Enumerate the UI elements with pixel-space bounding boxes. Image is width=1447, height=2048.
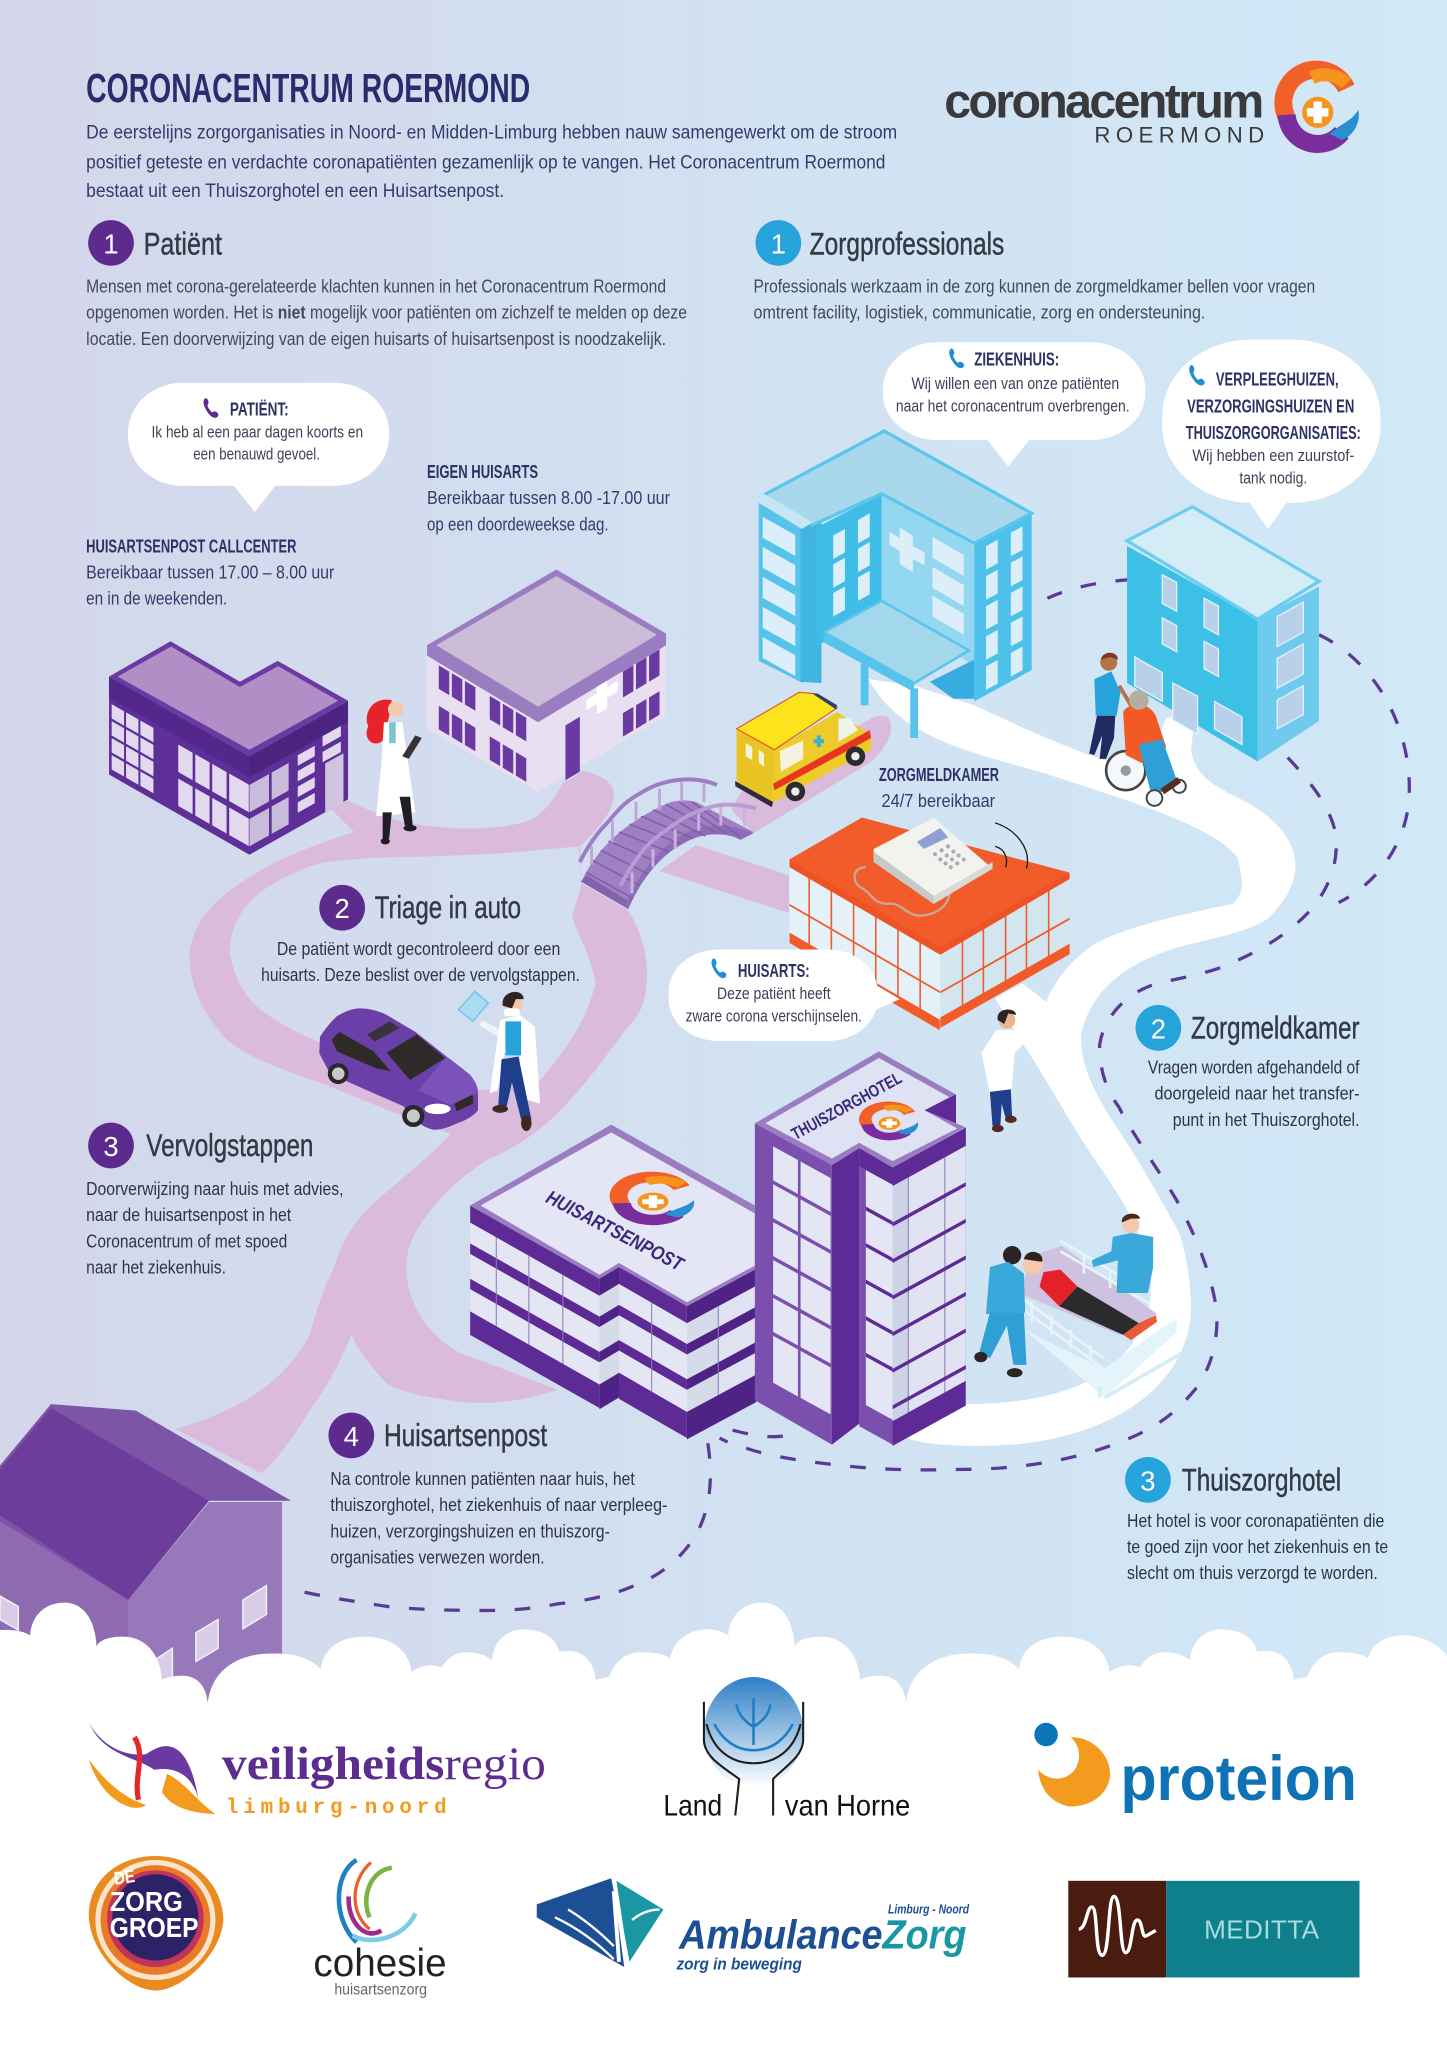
building: purple callcenter (109, 641, 348, 856)
logo: ambulancezorg: zorg in beweging (676, 1955, 802, 1974)
person: doctor with clipboard (367, 700, 422, 844)
section: zorgprofessionals: omtrent facility, logistiek, communicatie, zorg en ondersteuning. (754, 302, 1205, 323)
section: huisartsenpost: thuiszorghotel, het ziekenhuis of naar verpleeg- (330, 1494, 667, 1515)
dashed routes (293, 580, 1409, 1610)
logo: de zorggroep: ZORG (110, 1886, 183, 1917)
person: nurse with wheelchair patient (1089, 653, 1186, 806)
intro text: De eerstelijns zorgorganisaties in Noord- en Midden-Limburg hebben nauw samengewerkt om de stroom (86, 121, 897, 143)
text: huisartsenpost callcenter: Bereikbaar tussen 17.00 – 8.00 uur (86, 562, 334, 583)
building: eigen huisarts practice (427, 569, 666, 792)
logo: land van horne (663, 1677, 910, 1823)
building: thuiszorghotel tower: THUISZORGHOTEL (788, 1068, 905, 1144)
speech bubble: verpleeghuizen: THUISZORGORGANISATIES: (1186, 422, 1361, 443)
section: triage in auto: huisarts. Deze beslist over de vervolgstappen. (261, 964, 580, 985)
section: patient: Mensen met corona-gerelateerde klachten kunnen in het Coronacentrum Roermond (86, 276, 666, 297)
title: CORONACENTRUM ROERMOND (86, 65, 530, 111)
speech bubble: patient: een benauwd gevoel. (193, 446, 320, 464)
logo: cohesie (313, 1860, 447, 1998)
logo: proteion (1034, 1723, 1357, 1814)
text: eigen huisarts: EIGEN HUISARTS (427, 461, 538, 482)
logo: coronacentrum roermond (944, 70, 1359, 147)
speech bubble: patient: Ik heb al een paar dagen koorts en (151, 424, 363, 442)
section: zorgprofessionals (754, 220, 1315, 323)
section: vervolgstappen: naar de huisartsenpost in het (86, 1204, 291, 1225)
speech bubble: huisarts: HUISARTS: (738, 960, 810, 981)
logo: veiligheidsregio limburg-noord (89, 1723, 546, 1820)
section: huisartsenpost: Na controle kunnen patiënten naar huis, het (330, 1468, 635, 1489)
text: huisartsenpost callcenter (86, 535, 334, 609)
speech bubble: verpleeghuizen: VERPLEEGHUIZEN, (1216, 368, 1339, 389)
section: triage in auto (261, 885, 580, 985)
person: doctor on phone (981, 1010, 1026, 1132)
logo: coronacentrum roermond: ROERMOND (1094, 122, 1264, 147)
section: thuiszorghotel: 3 (1140, 1465, 1156, 1496)
speech bubble: patient: PATIËNT: (230, 398, 289, 419)
logo: de zorggroep (89, 1856, 223, 1991)
section: thuiszorghotel: Het hotel is voor coronapatiënten die (1127, 1510, 1384, 1531)
section: zorgmeldkamer: Zorgmeldkamer (1191, 1010, 1360, 1045)
section: patient: Patiënt (144, 227, 222, 262)
section: vervolgstappen: naar het ziekenhuis. (86, 1256, 226, 1277)
section: huisartsenpost: organisaties verwezen worden. (330, 1546, 545, 1567)
building: zorgmeldkamer (790, 818, 1070, 1030)
building: huisartsenpost (470, 1125, 756, 1439)
section: thuiszorghotel: slecht om thuis verzorgd te worden. (1127, 1562, 1378, 1583)
section: huisartsenpost: 4 (344, 1421, 359, 1452)
section: zorgmeldkamer: 2 (1151, 1013, 1166, 1044)
speech bubble: ziekenhuis: ZIEKENHUIS: (974, 349, 1059, 370)
logo: land van horne: Land (663, 1790, 722, 1823)
logo: coronacentrum roermond: coronacentrum (944, 75, 1264, 129)
section: thuiszorghotel: te goed zijn voor het ziekenhuis en te (1127, 1536, 1388, 1557)
section: zorgmeldkamer: Vragen worden afgehandeld of (1148, 1057, 1360, 1078)
logo: de zorggroep: DE (113, 1865, 136, 1889)
text: huisartsenpost callcenter: en in de weekenden. (86, 588, 227, 609)
speech bubble: verpleeghuizen: Wij hebben een zuurstof- (1192, 447, 1354, 465)
speech bubble: ziekenhuis: Wij willen een van onze patiënten (912, 375, 1119, 393)
text: zorgmeldkamer label (879, 764, 999, 811)
section: zorgmeldkamer: punt in het Thuiszorghotel. (1173, 1109, 1360, 1130)
section: zorgprofessionals: Zorgprofessionals (810, 227, 1004, 262)
speech bubble: verpleeghuizen: tank nodig. (1239, 469, 1307, 487)
section: zorgmeldkamer (1136, 1005, 1360, 1130)
logo: meditta (1068, 1881, 1360, 1977)
building: huisartsenpost: HUISARTSENPOST (542, 1187, 688, 1277)
building: hospital (759, 431, 1032, 738)
section: vervolgstappen (86, 1123, 343, 1277)
logo: cohesie: cohesie (313, 1942, 447, 1985)
bridge (580, 779, 756, 909)
logo: ambulancezorg (537, 1878, 970, 1974)
car (319, 1008, 478, 1130)
section: zorgmeldkamer: doorgeleid naar het transfer- (1154, 1083, 1360, 1104)
intro text: bestaat uit een Thuiszorghotel en een Huisartsenpost. (86, 180, 504, 202)
logo: veiligheidsregio limburg-noord: limburg-noord (226, 1797, 447, 1820)
section: triage in auto: Triage in auto (375, 890, 521, 925)
section: patient: 1 (103, 228, 119, 259)
section: patient (86, 220, 687, 349)
text: zorgmeldkamer label: 24/7 bereikbaar (882, 790, 995, 811)
text: zorgmeldkamer label: ZORGMELDKAMER (879, 764, 999, 785)
section: zorgprofessionals: Professionals werkzaam in de zorg kunnen de zorgmeldkamer bellen voor vragen (754, 276, 1315, 297)
speech bubble: huisarts (669, 950, 900, 1041)
text: huisartsenpost callcenter: HUISARTSENPOST CALLCENTER (86, 535, 296, 556)
intro text (86, 121, 897, 202)
logo: cohesie: huisartsenzorg (334, 1981, 427, 1998)
section: thuiszorghotel: Thuiszorghotel (1182, 1462, 1341, 1497)
section: vervolgstappen: 3 (103, 1131, 119, 1162)
speech bubble: ziekenhuis (883, 342, 1145, 466)
section: triage in auto: 2 (335, 893, 350, 924)
white care road (868, 679, 1296, 1446)
section: vervolgstappen: Doorverwijzing naar huis met advies, (86, 1178, 343, 1199)
section: huisartsenpost: Huisartsenpost (384, 1418, 547, 1453)
text: eigen huisarts (427, 461, 670, 534)
logo: veiligheidsregio limburg-noord: veiligheids regio (222, 1738, 546, 1790)
section: huisartsenpost: huizen, verzorgingshuizen en thuiszorg- (330, 1520, 610, 1541)
logo: ambulancezorg: Limburg - Noord (888, 1901, 970, 1916)
building: nursing home (1127, 507, 1319, 761)
speech bubble: verpleeghuizen (1162, 340, 1380, 529)
section: huisartsenpost (328, 1413, 667, 1567)
building: thuiszorghotel tower (755, 1051, 966, 1446)
intro text: positief geteste en verdachte coronapatiënten gezamenlijk op te vangen. Het Coronacentrum Roermond (86, 151, 885, 173)
logo: ambulancezorg: AmbulanceZorg (678, 1912, 967, 1958)
lilac patient road (175, 716, 891, 1473)
person: doctor with tablet (458, 991, 540, 1131)
text: eigen huisarts: Bereikbaar tussen 8.00 -17.00 uur (427, 487, 670, 508)
section: patient: opgenomen worden. Het is niet mogelijk voor patiënten om zichzelf te melden op deze (86, 302, 687, 323)
speech bubble: ziekenhuis: naar het coronacentrum overbrengen. (896, 397, 1130, 415)
purple house (0, 1404, 291, 1724)
clouds (0, 1603, 1447, 2048)
speech bubble: patient (128, 383, 389, 512)
section: zorgprofessionals: 1 (771, 228, 786, 259)
section: vervolgstappen: Vervolgstappen (146, 1128, 313, 1163)
logo: meditta: MEDITTA (1204, 1914, 1320, 1944)
icon: telephone on roof (855, 818, 1027, 916)
speech bubble: verpleeghuizen: VERZORGINGSHUIZEN EN (1187, 396, 1354, 417)
text: eigen huisarts: op een doordeweekse dag. (427, 513, 609, 534)
ambulance (735, 692, 871, 807)
logo: land van horne: van Horne (785, 1790, 910, 1823)
section: triage in auto: De patiënt wordt gecontroleerd door een (277, 938, 560, 959)
logo: de zorggroep: GROEP (110, 1912, 199, 1943)
person group: hospital bed scene (974, 1214, 1182, 1398)
section: thuiszorghotel (1125, 1457, 1388, 1583)
speech bubble: huisarts: zware corona verschijnselen. (686, 1007, 862, 1025)
logo: proteion: proteion (1121, 1744, 1357, 1814)
section: vervolgstappen: Coronacentrum of met spoed (86, 1230, 287, 1251)
section: patient: locatie. Een doorverwijzing van de eigen huisarts of huisartsenpost is noodzakelijk. (86, 328, 666, 349)
speech bubble: huisarts: Deze patiënt heeft (717, 985, 831, 1003)
